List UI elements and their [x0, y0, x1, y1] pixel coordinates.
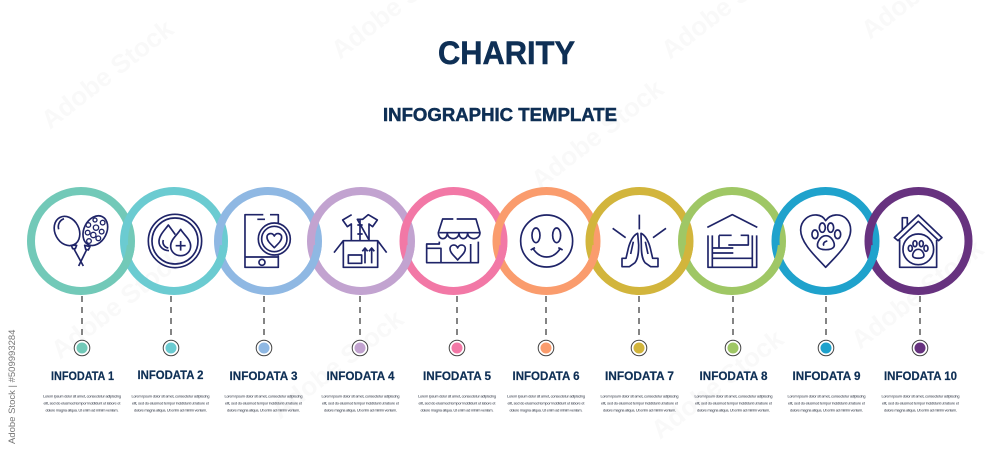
icon: phone with heart	[245, 215, 290, 267]
text block 1	[43, 369, 121, 412]
text block 9: dolore magna aliqua. Ut enim ad minim veniam.	[790, 408, 863, 412]
text block 5: Lorem ipsum dolor sit amet, consectetur adipiscing	[418, 394, 496, 398]
text block 10: elit, sed do eiusmod tempor incididunt ut labore et	[882, 400, 960, 406]
text block 9: INFODATA 9	[792, 369, 861, 383]
ring chain	[31, 191, 968, 291]
connector and marker 1	[74, 296, 90, 356]
text block 3	[224, 369, 303, 412]
text block 8: dolore magna aliqua. Ut enim ad minim veniam.	[697, 408, 770, 412]
subtitle: INFOGRAPHIC TEMPLATE	[383, 105, 617, 125]
icon: balloons	[49, 212, 113, 266]
text: Adobe Stock	[265, 303, 409, 425]
text block 3: elit, sed do eiusmod tempor incididunt ut labore et	[225, 400, 303, 406]
connector and marker 10	[912, 296, 928, 356]
text block 2: elit, sed do eiusmod tempor incididunt ut labore et	[132, 400, 210, 406]
text block 4: Lorem ipsum dolor sit amet, consectetur adipiscing	[322, 394, 400, 398]
text block 9: elit, sed do eiusmod tempor incididunt ut labore et	[788, 400, 866, 406]
title: CHARITY	[438, 35, 575, 71]
icon: charity shop	[427, 219, 480, 263]
text block 6: INFODATA 6	[512, 369, 580, 383]
icon: smiley	[521, 215, 573, 267]
connector and marker 8	[725, 296, 741, 356]
text block 5: elit, sed do eiusmod tempor incididunt ut labore et	[418, 400, 496, 406]
connector and marker 4	[352, 296, 368, 356]
text: Adobe Stock	[525, 73, 669, 195]
text block 5	[418, 369, 496, 412]
text block 8: INFODATA 8	[700, 369, 768, 383]
text block 10	[882, 369, 960, 412]
text block 4: INFODATA 4	[326, 369, 395, 383]
text block 10: Lorem ipsum dolor sit amet, consectetur adipiscing	[882, 394, 960, 398]
icon: heart with paw	[801, 215, 851, 267]
connector and marker 9	[818, 296, 834, 356]
text block 7	[600, 369, 679, 412]
icon: blood drops	[148, 214, 202, 268]
text block 6: elit, sed do eiusmod tempor incididunt ut labore et	[508, 400, 585, 406]
text block 7: elit, sed do eiusmod tempor incididunt ut labore et	[601, 400, 679, 406]
text block 9	[788, 369, 866, 412]
text block 2: Lorem ipsum dolor sit amet, consectetur adipiscing	[132, 394, 210, 398]
text block 2: dolore magna aliqua. Ut enim ad minim veniam.	[134, 408, 207, 412]
text block 6: Lorem ipsum dolor sit amet, consectetur adipiscing	[507, 394, 585, 398]
text block 8: Lorem ipsum dolor sit amet, consectetur adipiscing	[694, 394, 772, 398]
text block 7: dolore magna aliqua. Ut enim ad minim veniam.	[603, 408, 676, 412]
icon: donation box with shirt	[334, 215, 387, 267]
text block 1: INFODATA 1	[51, 369, 114, 383]
text block 7: Lorem ipsum dolor sit amet, consectetur adipiscing	[600, 394, 678, 398]
text: Adobe Stock	[845, 233, 989, 355]
connector and marker 5	[449, 296, 465, 356]
text block 6: dolore magna aliqua. Ut enim ad minim veniam.	[510, 408, 582, 412]
text: Adobe Stock	[645, 323, 789, 445]
text block 10: dolore magna aliqua. Ut enim ad minim veniam.	[884, 408, 957, 412]
text block 3: INFODATA 3	[230, 369, 298, 383]
text block 10: INFODATA 10	[884, 369, 957, 383]
text block 1: elit, sed do eiusmod tempor incididunt ut labore et	[44, 400, 121, 406]
icon: pet house	[894, 215, 942, 267]
text: Adobe Stock	[45, 243, 189, 365]
text block 4	[322, 369, 400, 412]
text: Adobe Stock	[35, 13, 179, 135]
text block 9: Lorem ipsum dolor sit amet, consectetur adipiscing	[788, 394, 866, 398]
connector and marker 3	[256, 296, 272, 356]
text block 8: elit, sed do eiusmod tempor incididunt ut labore et	[695, 400, 773, 406]
connector and marker 7	[631, 296, 647, 356]
text block 2	[132, 368, 210, 412]
text block 4: dolore magna aliqua. Ut enim ad minim veniam.	[324, 408, 397, 412]
text block 7: INFODATA 7	[605, 369, 674, 383]
text block 3: Lorem ipsum dolor sit amet, consectetur adipiscing	[224, 394, 302, 398]
icon: praying hands	[613, 215, 666, 267]
text block 5: INFODATA 5	[423, 369, 491, 383]
text block 6	[507, 369, 585, 412]
text block 1: dolore magna aliqua. Ut enim ad minim veniam.	[46, 408, 118, 412]
text block 3: dolore magna aliqua. Ut enim ad minim veniam.	[227, 408, 300, 412]
text block 4: elit, sed do eiusmod tempor incididunt ut labore et	[322, 400, 400, 406]
icon: shelter	[707, 215, 757, 267]
connector and marker 2	[163, 296, 179, 356]
text block 8	[694, 369, 773, 412]
stock side label: Adobe Stock | #509993284	[7, 330, 18, 444]
text block 5: dolore magna aliqua. Ut enim ad minim veniam.	[420, 408, 494, 412]
text block 1: Lorem ipsum dolor sit amet, consectetur adipiscing	[43, 394, 121, 398]
text block 2: INFODATA 2	[138, 368, 204, 382]
connector and marker 6	[538, 296, 554, 356]
